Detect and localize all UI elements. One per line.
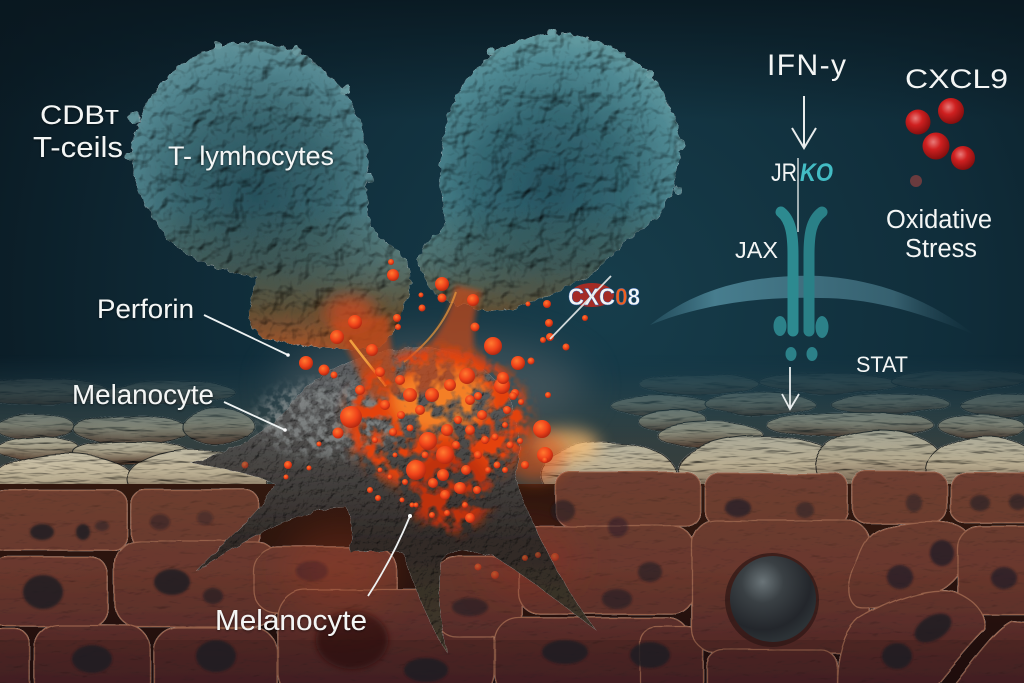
label: CXCL8 with red blot and leader — [550, 276, 640, 339]
label: CD8 T-cells — [33, 100, 123, 164]
label: Melanocyte lower with leader: Melanocyte — [215, 605, 367, 637]
label: STAT: STAT — [856, 352, 908, 377]
arrow: IFN-y down — [792, 96, 816, 148]
panel: tissue cell layer — [0, 472, 1024, 683]
receptor right arm — [809, 212, 822, 331]
STAT dots — [786, 347, 818, 361]
line through receptor — [797, 158, 799, 232]
label: T-lymphocytes: T- lymhocytes — [168, 141, 334, 171]
label: Perforin with leader: Perforin — [97, 294, 194, 324]
immune synapse stalks — [324, 285, 530, 532]
cell nuclei — [23, 494, 1024, 682]
warm glow behind lesion — [285, 429, 599, 615]
label: Oxidative Stress: Oxidative — [886, 206, 992, 234]
label: Melanocyte lower with leader — [215, 514, 412, 637]
label: CD8 T-cells: CDBт — [40, 100, 119, 130]
melanocyte body — [190, 347, 596, 653]
label: CXCL8 with red blot and leader: CXC08 — [568, 284, 640, 311]
speckled grey fuzz on melanocyte — [255, 382, 405, 458]
keratinocyte cells — [0, 472, 1024, 683]
panel: epidermis surface cobbles — [0, 370, 1024, 484]
label: JR: JR — [771, 159, 797, 187]
label: Oxidative Stress — [886, 206, 992, 263]
granule droplets — [242, 259, 588, 579]
receptor foot domains — [774, 316, 828, 338]
label: IFN-y: IFN-y — [767, 49, 846, 82]
label: Melanocyte upper with leader: Melanocyte — [72, 379, 214, 410]
label: Melanocyte upper with leader — [72, 379, 287, 432]
blotchy molten core — [346, 348, 530, 532]
label: Oxidative Stress: Stress — [905, 235, 977, 263]
ruby droplets — [906, 98, 975, 187]
arrow: STAT down — [782, 367, 799, 409]
panel: CXCL9 and oxidative stress — [886, 64, 1008, 263]
label: KO teal: KO — [800, 159, 833, 187]
grey mist around lesion — [275, 335, 585, 435]
dark pigment blotch — [316, 611, 388, 669]
label: CD8 T-cells: T-ceils — [33, 132, 123, 164]
cell membrane arc — [650, 276, 975, 335]
right T-cell — [418, 28, 685, 311]
left T-cell — [125, 41, 410, 349]
label: JAX: JAX — [735, 237, 778, 263]
label: Perforin with leader — [97, 294, 290, 357]
label: CXCL9: CXCL9 — [905, 64, 1008, 94]
large dark nucleus — [725, 553, 819, 647]
receptor left arm — [781, 212, 793, 331]
vignette top — [0, 0, 1024, 120]
panel: JAK-STAT pathway — [650, 49, 975, 409]
